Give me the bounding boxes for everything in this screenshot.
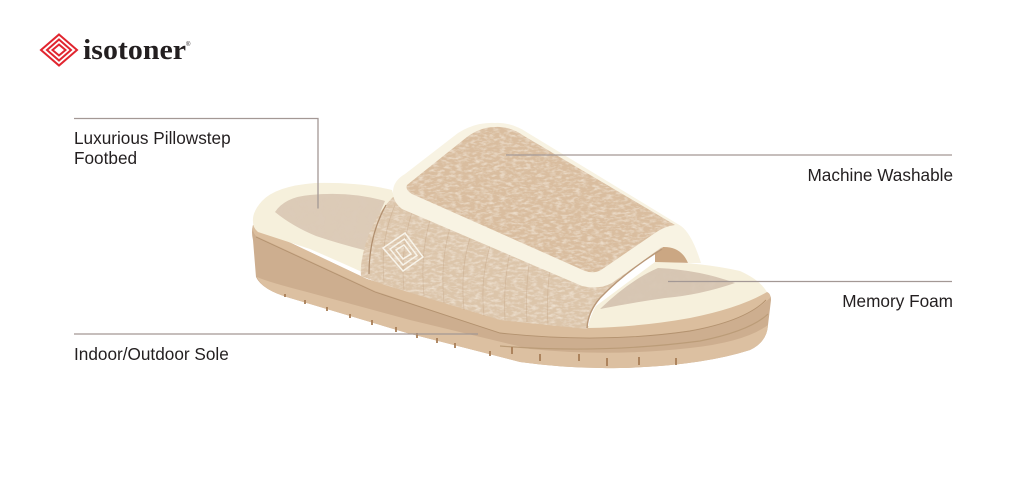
- callout: Machine Washable: Machine Washable: [807, 165, 953, 185]
- wordmark: isotoner: [83, 34, 186, 66]
- slipper illustration: [252, 123, 771, 368]
- callout: Luxurious Pillowstep Footbed: Luxurious Pillowstep: [74, 128, 231, 148]
- right footbed: memory foam: [600, 268, 735, 309]
- left footbed: Pillowstep: [275, 194, 385, 250]
- dark toe opening: [655, 244, 692, 263]
- callout: Indoor/Outdoor Sole: Indoor/Outdoor Sole: [74, 344, 229, 364]
- callout: Luxurious Pillowstep Footbed: Footbed: [74, 148, 137, 168]
- sole: [252, 225, 771, 368]
- icon: red diamond mark: [41, 34, 77, 66]
- callout: Luxurious Pillowstep Footbed: [74, 118, 318, 208]
- tread notches: [285, 294, 676, 366]
- right footbed rim: [588, 262, 767, 328]
- strap front edge: [587, 249, 662, 328]
- icon: embroidered diamond: [383, 233, 423, 271]
- callout: Memory Foam: Memory Foam: [842, 291, 953, 311]
- registered mark: ®: [186, 41, 191, 48]
- strap ribs: [383, 205, 550, 325]
- strap base: [361, 197, 662, 329]
- flap trim: [393, 123, 701, 287]
- flap: machine washable: [407, 127, 675, 272]
- left footbed rim: [253, 183, 395, 272]
- logo: isotoner: [41, 34, 191, 66]
- strap seam: [369, 205, 386, 274]
